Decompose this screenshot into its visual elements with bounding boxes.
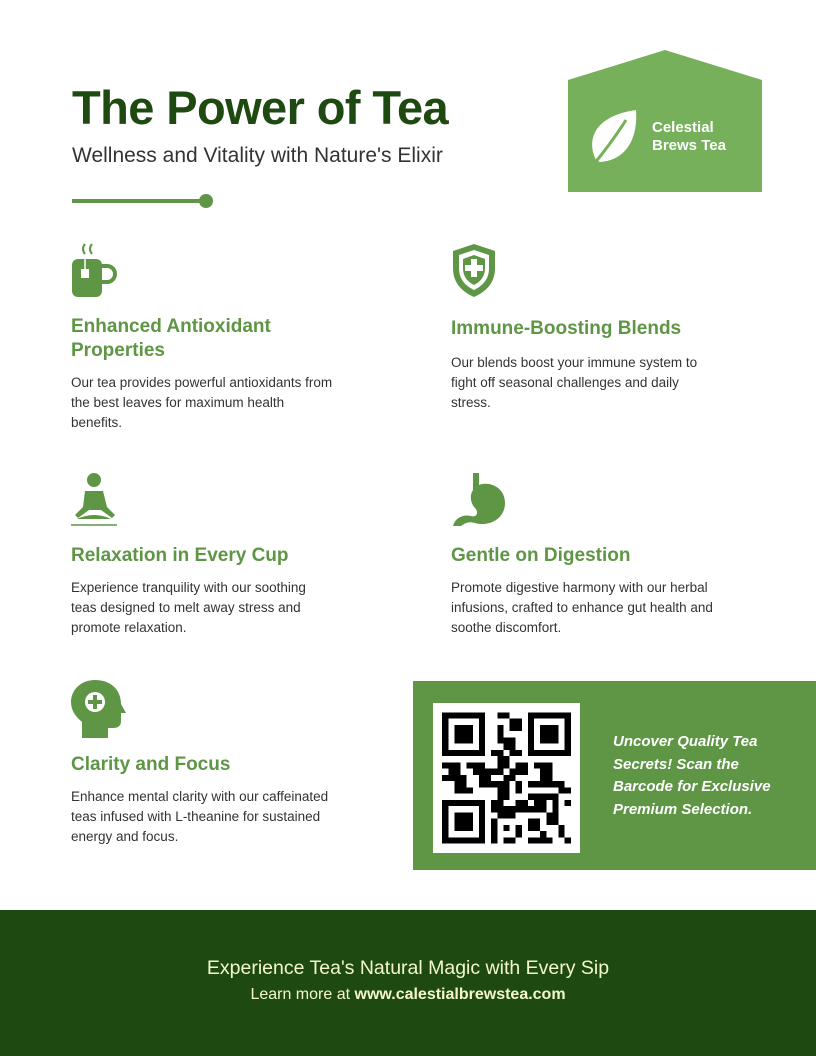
icon: stomach bbox=[453, 473, 505, 526]
panel: QR callout bbox=[413, 681, 816, 870]
title: The Power of Tea bbox=[72, 81, 448, 134]
footer link: Learn more at www.calestialbrewstea.com bbox=[250, 986, 566, 1003]
feature: clarity: Enhance mental clarity with our caffeinated teas infused with L-theanine for sustained energy and focus. bbox=[71, 789, 328, 844]
feature: immune: Our blends boost your immune system to fight off seasonal challenges and daily stress. bbox=[451, 355, 697, 410]
icon: meditation bbox=[71, 473, 117, 526]
feature: relaxation: Experience tranquility with our soothing teas designed to melt away stress and promote relaxation. bbox=[71, 580, 306, 635]
callout text: Uncover Quality Tea Secrets! Scan the Barcode for Exclusive Premium Selection. bbox=[613, 733, 771, 818]
footer bbox=[0, 910, 816, 1056]
logo badge: Celestial bbox=[652, 119, 714, 136]
icon: leaf bbox=[592, 110, 636, 164]
icon: shield bbox=[453, 244, 495, 297]
feature: clarity: Clarity and Focus bbox=[71, 754, 230, 775]
divider slider accent bbox=[72, 194, 213, 208]
feature: immune: Immune-Boosting Blends bbox=[451, 318, 681, 339]
logo badge: Brews Tea bbox=[652, 137, 727, 154]
feature: antioxidant: Enhanced Antioxidant Properties bbox=[71, 316, 271, 361]
feature: relaxation bbox=[71, 473, 306, 635]
icon: tea cup bbox=[72, 243, 117, 297]
icon: head with plus bbox=[71, 680, 126, 738]
logo badge bbox=[568, 50, 762, 192]
feature: digestion bbox=[451, 473, 713, 635]
footer tagline: Experience Tea's Natural Magic with Every Sip bbox=[207, 957, 609, 979]
subtitle: Wellness and Vitality with Nature's Elixir bbox=[72, 144, 443, 167]
feature: clarity bbox=[71, 680, 328, 844]
feature: antioxidant bbox=[71, 243, 332, 430]
QR code bbox=[433, 703, 580, 853]
feature: antioxidant: Our tea provides powerful antioxidants from the best leaves for maximum health benefits. bbox=[71, 375, 332, 430]
feature: immune bbox=[451, 244, 697, 410]
feature: digestion: Gentle on Digestion bbox=[451, 545, 630, 566]
feature: digestion: Promote digestive harmony with our herbal infusions, crafted to enhance gut health and soothe discomfort. bbox=[451, 580, 713, 635]
feature: relaxation: Relaxation in Every Cup bbox=[71, 545, 289, 566]
